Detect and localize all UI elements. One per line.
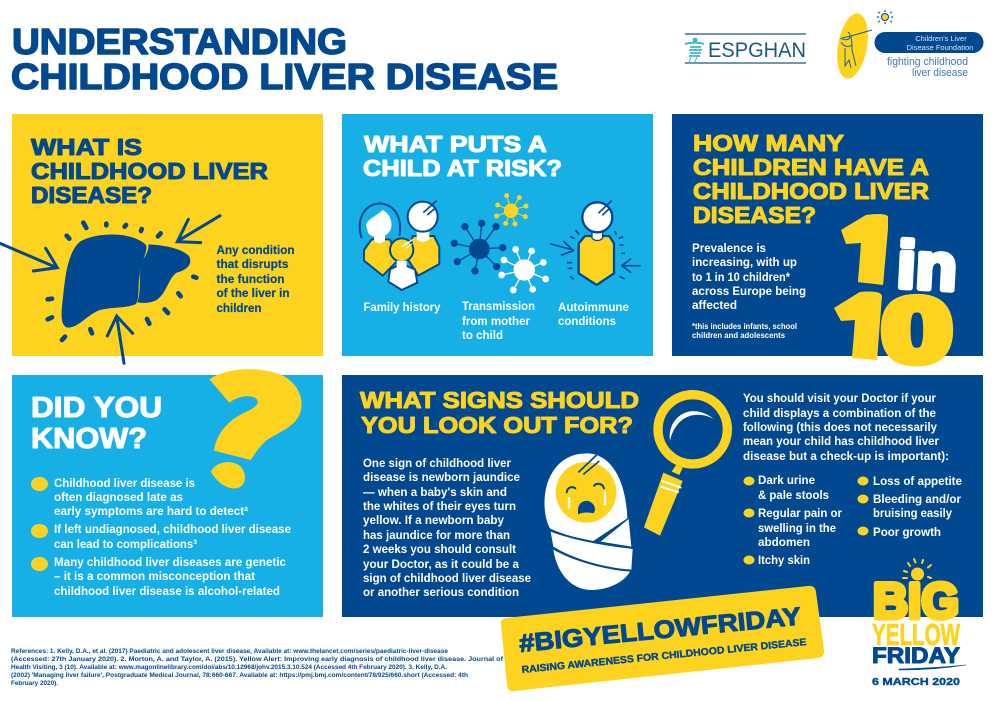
text: newborn jaundice: or another serious condition [363, 585, 519, 599]
banner: bigyellowfriday: RAISING AWARENESS FOR CHILDHOOD LIVER DISEASE [521, 637, 807, 676]
icon: question mark [209, 369, 302, 488]
text: visit your doctor: mean your child has childhood liver [743, 434, 939, 448]
text: visit your doctor: You should visit your Doctor if your [743, 391, 936, 405]
heading: what signs: YOU LOOK OUT FOR? [361, 412, 633, 438]
footnote [692, 321, 797, 340]
panel: how many children [672, 114, 983, 381]
text: visit your doctor [743, 391, 949, 463]
bullet list: symptoms column 2 [858, 474, 962, 539]
heading: did you know [31, 392, 162, 455]
text: newborn jaundice: the whites of their eyes turn [363, 499, 516, 513]
references: (Accessed: 27th January 2020). 2. Morton, A. and Taylor, A. (2015). Yellow Alert: Improving early diagnosis of childhood liver disease. Journal of [11, 656, 504, 663]
text: newborn jaundice: sign of childhood liver disease [363, 571, 531, 585]
footnote: *this includes infants, school [692, 321, 797, 331]
big number: 1 in 10: 0 [882, 281, 952, 381]
bullet list: facts: early symptoms are hard to detect² [54, 504, 248, 518]
references [11, 648, 504, 687]
logo: Children's Liver Disease Foundation: fighting childhood [887, 56, 968, 68]
heading: did you know: DID YOU [31, 392, 162, 424]
label: autoimmune conditions: conditions [558, 314, 616, 328]
panel: what puts a child at risk [342, 114, 653, 356]
bullet list: facts [31, 476, 291, 598]
text: prevalence [692, 241, 806, 312]
text: newborn jaundice: One sign of childhood liver [363, 456, 511, 470]
label: transmission from mother to child [462, 299, 535, 342]
heading: what signs: WHAT SIGNS SHOULD [360, 387, 639, 413]
text: liver description: children [216, 301, 262, 315]
text: prevalence: increasing, with up [692, 255, 797, 269]
bullet list: symptoms column 1: Itchy skin [758, 553, 810, 567]
logo: Children's Liver Disease Foundation: Children's Liver [915, 34, 967, 43]
heading: what puts a child at risk: WHAT PUTS A [364, 131, 547, 157]
icon: autoimmune figure [551, 201, 640, 285]
icon: crying baby [544, 453, 633, 590]
footnote: children and adolescents [692, 330, 785, 340]
bullet list: facts: Many childhood liver diseases are genetic [54, 555, 286, 569]
panel: did you know [12, 369, 323, 617]
text: liver description: that disrupts [216, 257, 289, 271]
bullet list: facts: If left undiagnosed, childhood liver disease [54, 522, 291, 536]
banner: bigyellowfriday [501, 586, 824, 691]
logo: big yellow friday: BIG [873, 573, 959, 629]
bullet list: symptoms column 2: Loss of appetite [873, 474, 962, 488]
big number: 1 in 10 [834, 214, 956, 366]
panel: what signs should you look out for [342, 375, 983, 617]
bullet list: symptoms column 1: Regular pain or [758, 506, 842, 520]
text: newborn jaundice: has jaundice for more than [363, 528, 510, 542]
text: newborn jaundice: — when a baby's skin and [363, 485, 507, 499]
references: (2002) 'Managing liver failure', Postgraduate Medical Journal, 78:660-667. Available at: https://pmj.bmj.com/content/78/925/660.short (Accessed: 4th [11, 672, 468, 679]
icon: viruses [451, 194, 548, 293]
heading: how many children [693, 130, 929, 228]
heading: what is childhood liver disease: CHILDHOOD LIVER [31, 158, 268, 184]
bullet list: symptoms column 2: bruising easily [873, 506, 952, 520]
heading: how many children: HOW MANY [693, 130, 844, 156]
bullet list: symptoms column 1: swelling in the [758, 521, 836, 535]
text: newborn jaundice: yellow. If a newborn baby [363, 513, 504, 527]
text: liver description [216, 243, 294, 315]
icon: liver with arrows [0, 216, 220, 363]
text: newborn jaundice [363, 456, 531, 599]
label: autoimmune conditions: Autoimmune [558, 300, 629, 314]
text: prevalence: to 1 in 10 children* [692, 270, 790, 284]
text: visit your doctor: following (this does not necessarily [743, 420, 937, 434]
title [11, 21, 558, 97]
title: CHILDHOOD LIVER DISEASE [11, 56, 558, 97]
text: liver description: Any condition [216, 243, 294, 257]
big number: 1 in 10: 1 [838, 190, 892, 306]
text: liver description: the function [216, 272, 284, 286]
banner: bigyellowfriday: #BIGYELLOWFRIDAY [518, 602, 803, 658]
references: February 2020). [11, 680, 58, 687]
heading: how many children: CHILDHOOD LIVER [693, 178, 929, 204]
heading: did you know: KNOW? [31, 423, 147, 455]
text: prevalence: affected [692, 298, 737, 312]
bullet list: facts: often diagnosed late as [54, 490, 183, 504]
text: newborn jaundice: disease is newborn jaundice [363, 470, 520, 484]
bullet list: facts: childhood liver disease is alcohol-related [54, 584, 280, 598]
bullet list: facts: can lead to complications³ [54, 537, 197, 551]
text: prevalence: across Europe being [692, 284, 806, 298]
logo: Children's Liver Disease Foundation [832, 10, 984, 81]
heading: how many children: DISEASE? [693, 202, 816, 228]
bullet list: facts: – it is a common misconception that [54, 569, 255, 583]
logo: big yellow friday: 6 MARCH 2020 [872, 677, 961, 688]
text: visit your doctor: disease but a check-up is important): [743, 449, 949, 463]
bullet list: facts: Childhood liver disease is [54, 476, 195, 490]
bullet list: symptoms column 1: abdomen [758, 535, 810, 549]
icon: sun [903, 559, 931, 580]
label: transmission from mother to child: from mother [462, 314, 530, 328]
panel: what is childhood liver disease [0, 114, 323, 363]
heading: what puts a child at risk [363, 131, 562, 181]
logo: Children's Liver Disease Foundation: Disease Foundation [907, 43, 973, 52]
bullet list: symptoms column 1 [744, 473, 842, 567]
label: autoimmune conditions [558, 300, 629, 328]
heading: what is childhood liver disease: DISEASE? [31, 182, 152, 208]
heading: what is childhood liver disease [31, 134, 268, 208]
label: family history: Family history [364, 300, 441, 314]
title: UNDERSTANDING [12, 21, 347, 62]
heading: what signs [360, 387, 639, 438]
text: prevalence: Prevalence is [692, 241, 766, 255]
logo: Children's Liver Disease Foundation: liver disease [912, 67, 968, 79]
references: References: 1. Kelly, D.A., et al. (2017) Paediatric and adolescent liver disease, Available at: www.thelancet.com/series/paediatric-liver-disease [11, 648, 448, 655]
text: newborn jaundice: your Doctor, as it could be a [363, 557, 519, 571]
big number: 1 in 10: in [895, 227, 959, 304]
label: transmission from mother to child: to child [462, 328, 503, 342]
heading: what is childhood liver disease: WHAT IS [31, 134, 142, 160]
references: Health Visiting, 3 (10). Available at: www.magonlinelibrary.com/doi/abs/10.12968/johv.2015.3.10.524 (Accessed 4th February 2020). 3. Kelly, D.A. [11, 664, 447, 671]
logo: big yellow friday [872, 559, 966, 688]
label: transmission from mother to child: Transmission [462, 299, 535, 313]
logo: ESPGHAN [685, 34, 806, 63]
icon: magnifying glass [644, 395, 727, 536]
icon: family [360, 201, 439, 290]
heading: how many children: CHILDREN HAVE A [693, 154, 929, 180]
heading: what puts a child at risk: CHILD AT RISK? [363, 155, 562, 181]
text: liver description: of the liver in [216, 286, 290, 300]
bullet list: symptoms column 2: Bleeding and/or [873, 492, 961, 506]
logo: ESPGHAN: ESPGHAN [708, 39, 806, 62]
bullet list: symptoms column 1: Dark urine [758, 473, 815, 487]
bullet list: symptoms column 1: & pale stools [758, 488, 829, 502]
logo: big yellow friday: FRIDAY [872, 643, 960, 668]
big number: 1 in 10: 1 [832, 265, 886, 381]
bullet list: symptoms column 2: Poor growth [873, 525, 941, 539]
text: newborn jaundice: 2 weeks you should consult [363, 542, 516, 556]
text: visit your doctor: child displays a combination of the [743, 406, 936, 420]
